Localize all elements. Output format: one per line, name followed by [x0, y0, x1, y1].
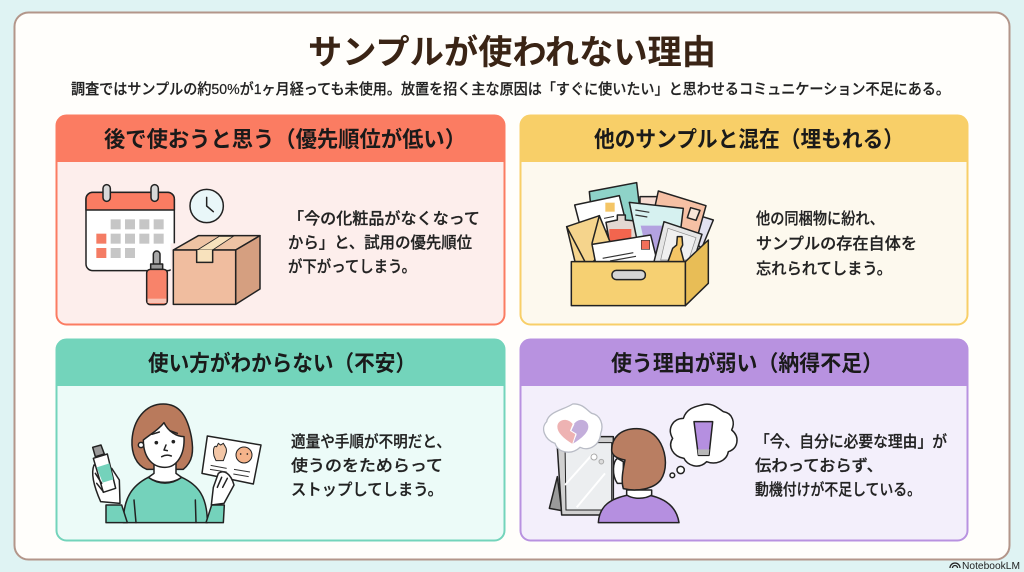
text: mixed in: 忘れられてしまう。 [756, 260, 892, 278]
panel header: postpone [56, 115, 505, 162]
panel header: mixed in [520, 115, 968, 162]
text: postpone: 「今の化粧品がなくなって [288, 209, 480, 228]
icon: woman at mirror with thought bubbles [544, 404, 737, 523]
panel: mixed in [520, 115, 968, 324]
text: unclear usage: ストップしてしまう。 [291, 481, 443, 499]
brand mark: NotebookLM: NotebookLM [962, 561, 1020, 572]
title: サンプルが使われない理由 [308, 33, 716, 72]
heading: weak reason: 使う理由が弱い（納得不足） [611, 351, 883, 376]
text: postpone: から」と、試用の優先順位 [288, 234, 472, 252]
panel: weak reason [520, 339, 968, 540]
text: unclear usage: 使うのをためらって [291, 457, 443, 475]
icon: calendar, clock, box and bottle [86, 185, 260, 305]
text: unclear usage [291, 432, 451, 499]
text: postpone [288, 209, 480, 276]
panel: postpone [56, 115, 505, 324]
text: weak reason: 動機付けが不足している。 [755, 480, 921, 499]
heading: unclear usage: 使い方がわからない（不安） [148, 351, 416, 376]
text: unclear usage: 適量や手順が不明だと、 [291, 432, 451, 451]
subtitle: 調査ではサンプルの約50%が1ヶ月経っても未使用。放置を招く主な原因は「すぐに使いたい」と思わせるコミュニケーション不足にある。 [71, 80, 950, 98]
text: mixed in: 他の同梱物に紛れ、 [756, 210, 884, 228]
icon: worried woman with bottle and card [93, 404, 261, 523]
panel header: weak reason [520, 339, 968, 386]
heading: mixed in: 他のサンプルと混在（埋もれる） [594, 127, 904, 152]
text: mixed in: サンプルの存在自体を [756, 235, 917, 253]
text: postpone: が下がってしまう。 [288, 257, 416, 276]
text: mixed in [756, 210, 917, 278]
panel: unclear usage [56, 339, 505, 540]
text: weak reason: 伝わっておらず、 [755, 457, 883, 475]
icon: box of mixed mail [567, 183, 713, 306]
heading: postpone: 後で使おうと思う（優先順位が低い） [104, 127, 466, 152]
panel header: unclear usage [56, 339, 505, 386]
text: weak reason: 「今、自分に必要な理由」が [755, 432, 947, 451]
text: weak reason [755, 432, 947, 499]
